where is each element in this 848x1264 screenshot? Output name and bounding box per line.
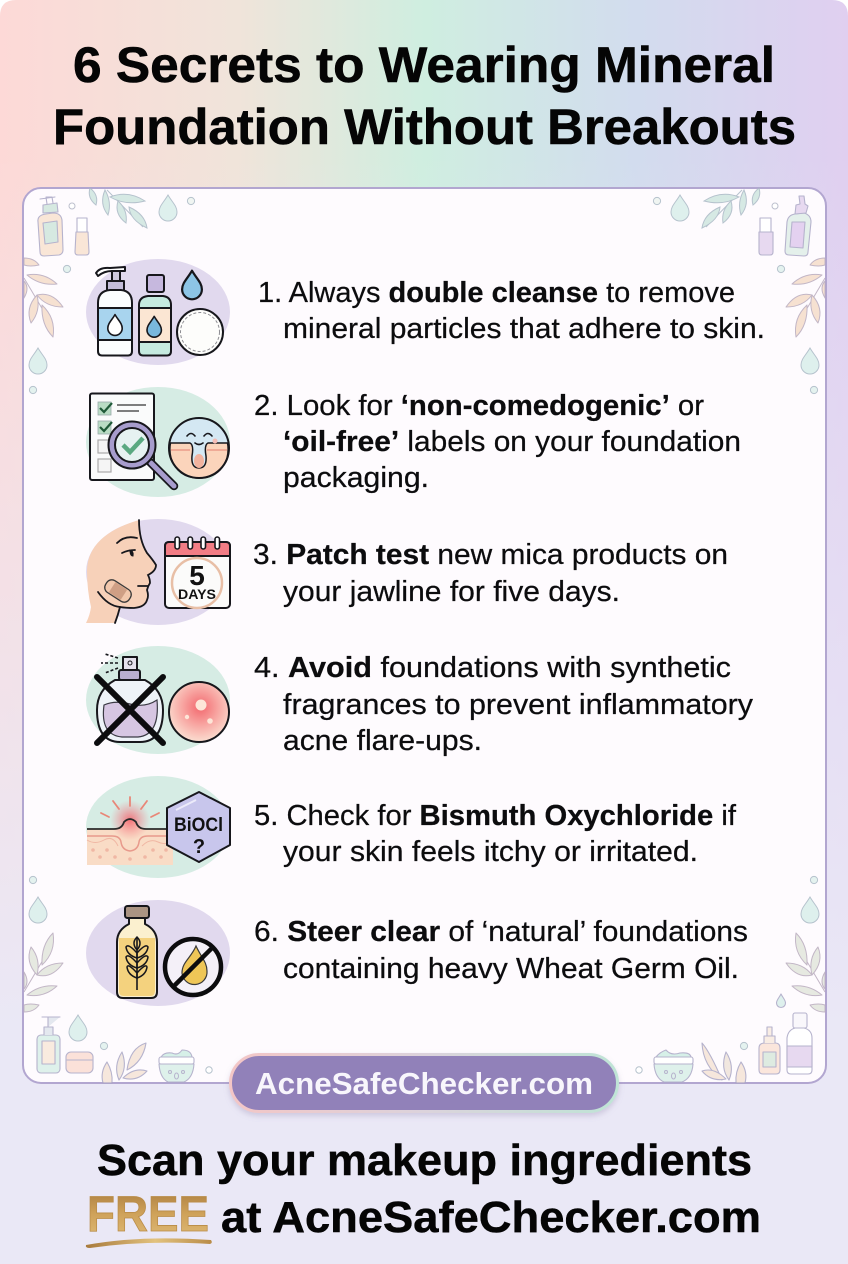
text: tip 1: 1. Always double cleanse to remove bbox=[258, 277, 735, 309]
text: tip 5 bbox=[254, 800, 737, 868]
website badge bbox=[230, 1054, 618, 1112]
decoration: corner botanicals and cosmetics bbox=[24, 188, 825, 1083]
text: tip 5: your skin feels itchy or irritated. bbox=[283, 836, 698, 868]
text: tip 6 bbox=[254, 916, 748, 985]
title: Foundation Without Breakouts bbox=[53, 99, 796, 155]
text: tip 2: 2. Look for ‘non-comedogenic’ or bbox=[254, 390, 704, 422]
text: tip 4: fragrances to prevent inflammatory bbox=[283, 689, 754, 721]
icon: cleansing bottles and cotton pad bbox=[86, 259, 230, 365]
decoration: top right bbox=[653, 188, 825, 394]
text: tip 6: 6. Steer clear of ‘natural’ foundations bbox=[254, 916, 748, 948]
icon: irritated skin and BiOCl hexagon: BiOCl bbox=[174, 815, 223, 836]
decoration: top left bbox=[24, 188, 195, 394]
title: 6 Secrets to Wearing Mineral bbox=[73, 37, 775, 93]
text: tip 4: 4. Avoid foundations with synthetic bbox=[254, 652, 731, 684]
icon: face patch test and five day calendar bbox=[86, 519, 230, 625]
icon: crossed-out perfume and inflamed skin bbox=[86, 646, 230, 754]
text: tip 2 bbox=[254, 390, 741, 494]
text: tip 4 bbox=[254, 652, 754, 757]
icon: wheat germ oil bottle and no-oil sign bbox=[86, 900, 230, 1006]
title bbox=[53, 37, 796, 155]
panel: tips card bbox=[23, 188, 826, 1083]
website badge: AcneSafeChecker.com bbox=[255, 1066, 593, 1101]
text: tip 4: acne flare-ups. bbox=[283, 725, 482, 757]
call to action: Scan your makeup ingredients bbox=[97, 1136, 752, 1185]
text: tip 2: ‘oil-free’ labels on your foundation bbox=[283, 426, 741, 458]
icon: face patch test and five day calendar: DAYS bbox=[178, 586, 216, 602]
text: tip 6: containing heavy Wheat Germ Oil. bbox=[283, 953, 739, 985]
text: tip 3 bbox=[253, 539, 728, 608]
icon: label checklist with magnifier and happy pore bbox=[86, 387, 230, 497]
text: tip 5: 5. Check for Bismuth Oxychloride if bbox=[254, 800, 737, 832]
text: tip 3: 3. Patch test new mica products on bbox=[253, 539, 728, 571]
call to action bbox=[86, 1136, 761, 1248]
icon: irritated skin and BiOCl hexagon: ? bbox=[193, 836, 205, 858]
decoration: bottom right bbox=[636, 876, 825, 1083]
text: tip 2: packaging. bbox=[283, 462, 429, 494]
call to action: at AcneSafeChecker.com bbox=[221, 1193, 761, 1242]
text: tip 1: mineral particles that adhere to skin. bbox=[283, 313, 765, 345]
text: tip 3: your jawline for five days. bbox=[283, 576, 620, 608]
call to action: FREE bbox=[87, 1186, 209, 1242]
decoration: bottom left bbox=[24, 876, 212, 1083]
icon: face patch test and five day calendar: 5 bbox=[189, 560, 205, 591]
text: tip 1 bbox=[258, 277, 765, 345]
icon: irritated skin and BiOCl hexagon bbox=[86, 776, 230, 878]
